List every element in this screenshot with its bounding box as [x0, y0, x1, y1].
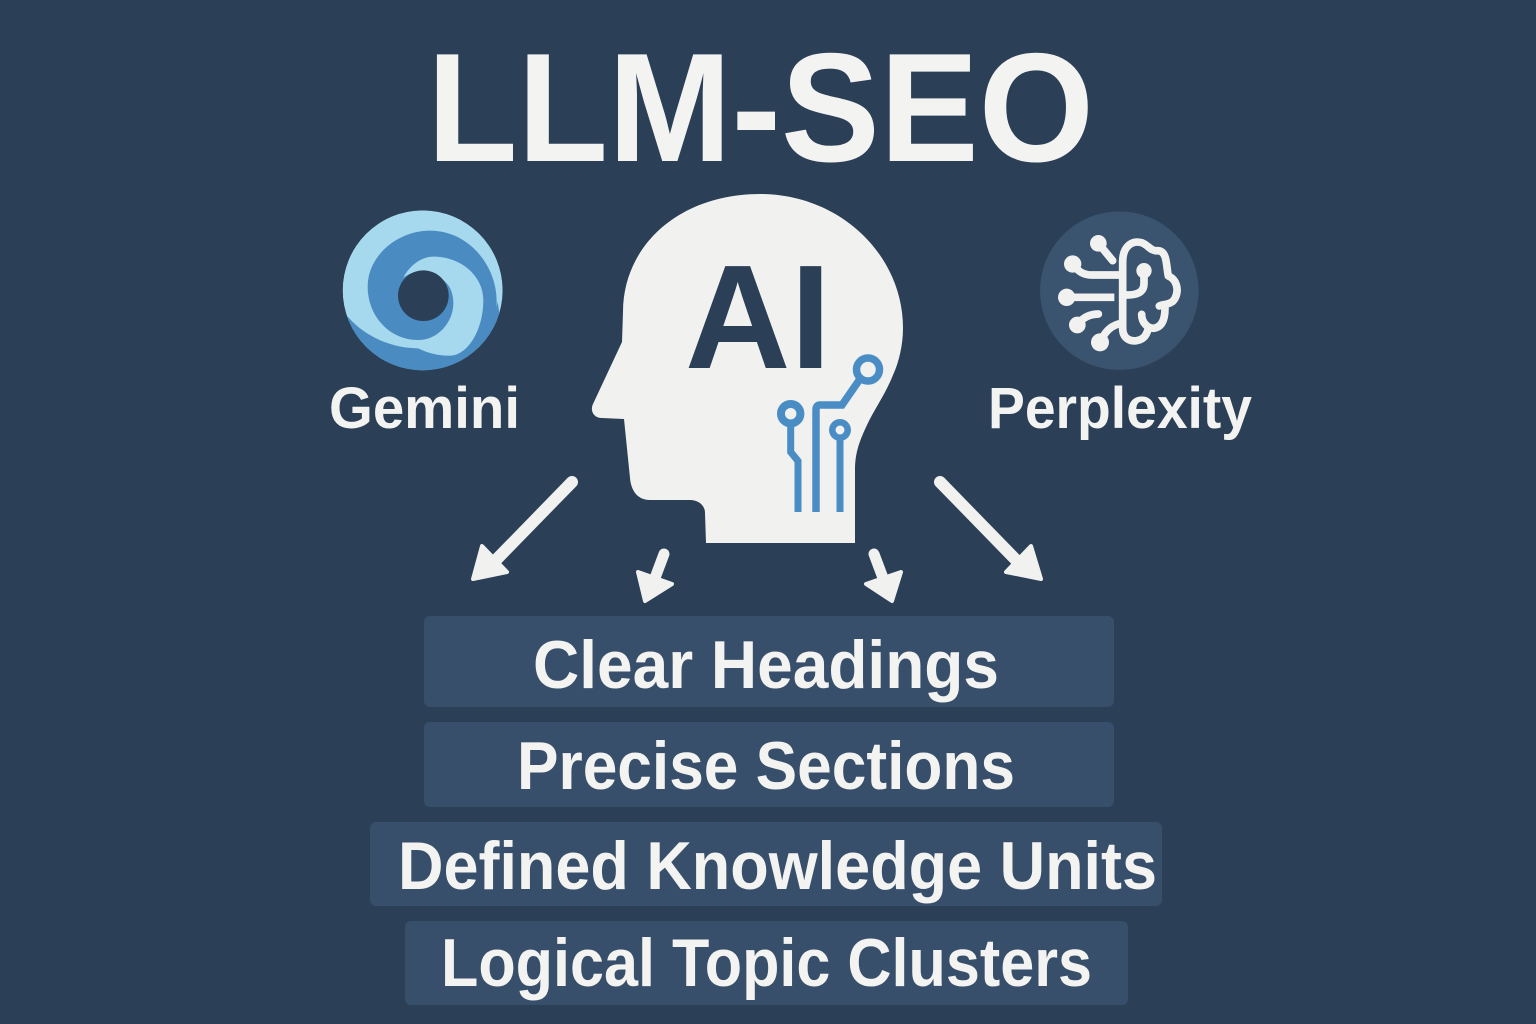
Gemini logo and label — [329, 210, 520, 441]
list item: Clear Headings — [424, 616, 1114, 707]
list item: Logical Topic Clusters: Logical Topic Clusters — [441, 925, 1092, 1001]
label: Gemini: Gemini — [329, 376, 520, 441]
Perplexity logo and label — [988, 211, 1252, 441]
circuit traces — [781, 358, 880, 512]
arrow: inner right — [866, 554, 901, 601]
list item: Defined Knowledge Units: Defined Knowledge Units — [398, 828, 1157, 904]
icon: brain network — [1040, 211, 1199, 370]
icon: Gemini swirl — [342, 210, 503, 370]
infographic canvas — [331, 52, 1252, 1005]
list item: Clear Headings: Clear Headings — [533, 627, 999, 703]
arrow: far right — [940, 482, 1041, 579]
arrow: inner left — [638, 554, 672, 601]
list item: Precise Sections: Precise Sections — [517, 728, 1015, 804]
label: Perplexity: Perplexity — [988, 376, 1252, 441]
title: LLM-SEO — [427, 21, 1094, 194]
arrow: far left — [473, 482, 572, 579]
arrows from head to list — [473, 482, 1041, 601]
text: AI: AI — [685, 235, 831, 400]
AI head icon — [592, 194, 903, 543]
head silhouette — [592, 194, 903, 543]
